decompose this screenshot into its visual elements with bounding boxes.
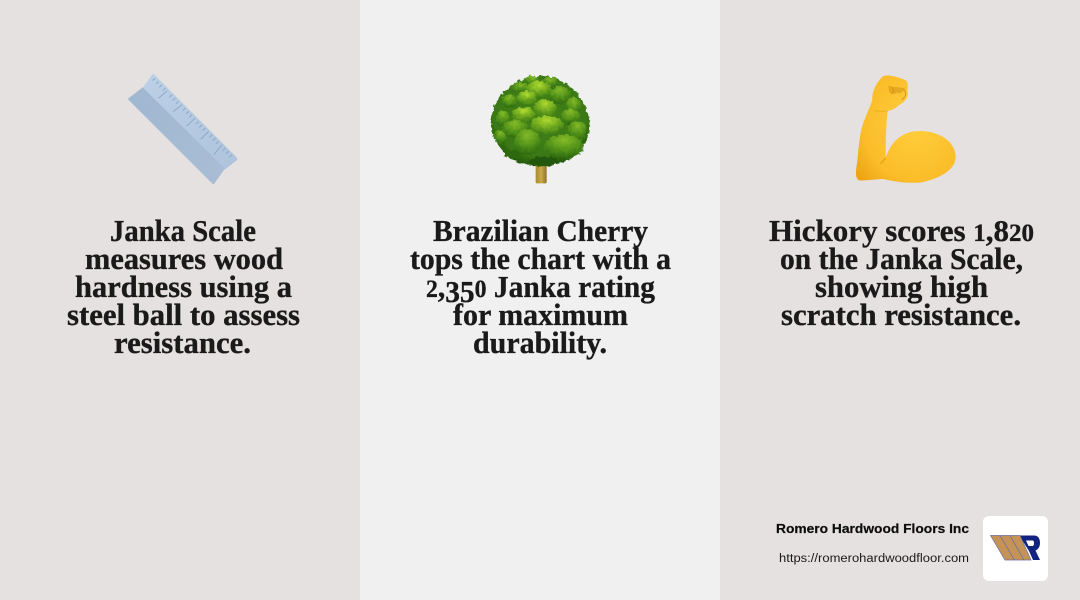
panel: left background — [0, 0, 360, 600]
heading: left panel: hardness using a — [75, 269, 292, 304]
crown — [491, 76, 589, 168]
trunk — [536, 164, 547, 183]
heading: right panel — [769, 213, 1034, 332]
heading: left panel: resistance. — [114, 325, 251, 360]
heading: right panel: Hickory scores 1,820 — [769, 213, 1034, 248]
logo — [983, 516, 1048, 581]
icon: flexed biceps — [856, 76, 956, 183]
logo: R letter — [1019, 536, 1040, 560]
heading: middle panel: durability. — [473, 325, 607, 360]
heading: middle panel: Brazilian Cherry — [433, 213, 648, 248]
heading: middle panel: 2, — [426, 269, 446, 304]
panel: right background — [720, 0, 1080, 600]
company name: Romero Hardwood Floors Inc — [776, 521, 969, 536]
icon: ruler — [128, 74, 237, 184]
heading: middle panel: tops the chart with a — [410, 241, 671, 276]
heading: right panel: scratch resistance. — [781, 297, 1021, 332]
logo: wood planks — [990, 536, 1031, 560]
heading: middle panel — [410, 213, 671, 360]
heading: left panel: steel ball to assess — [67, 297, 300, 332]
heading: left panel: measures wood — [85, 241, 283, 276]
heading: middle panel: 0 — [475, 276, 487, 303]
heading: middle panel: Janka rating — [494, 269, 664, 304]
panel: middle background — [360, 0, 720, 600]
icon: tree — [491, 76, 589, 183]
heading: middle panel: for maximum — [453, 297, 628, 332]
heading: right panel: on the Janka Scale, — [780, 241, 1023, 276]
heading: left panel — [67, 213, 300, 360]
heading: right panel: showing high — [815, 269, 988, 304]
heading: left panel: Janka Scale — [110, 213, 256, 248]
heading: middle panel: 35 — [445, 274, 475, 309]
fist crease — [888, 86, 905, 94]
company url: https://romerohardwoodfloor.com — [779, 553, 969, 565]
